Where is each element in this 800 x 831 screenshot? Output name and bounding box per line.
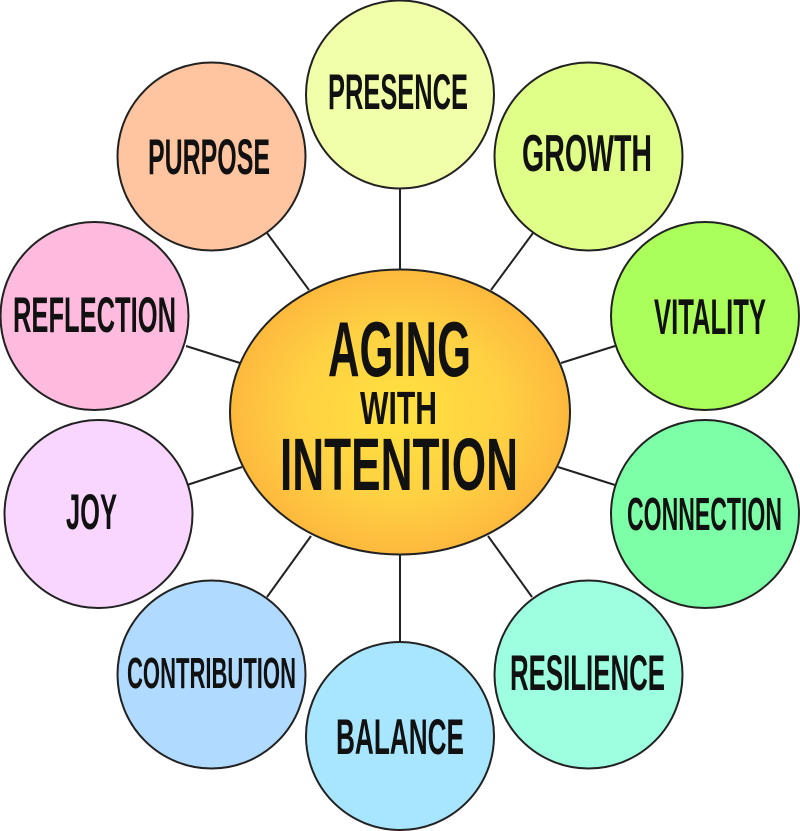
circle: presence: PRESENCE xyxy=(328,64,468,120)
circle: reflection xyxy=(0,222,188,410)
circle: connection xyxy=(611,420,799,608)
circle: presence xyxy=(306,0,494,188)
hub title line: aging: AGING xyxy=(328,305,471,393)
circle: purpose xyxy=(118,62,306,250)
circle: contribution xyxy=(118,580,306,768)
circle: balance xyxy=(306,642,494,830)
connector lines xyxy=(186,188,615,642)
circle: vitality xyxy=(611,222,799,410)
hub title line: intention: INTENTION xyxy=(280,423,518,506)
circle: joy: JOY xyxy=(66,484,117,540)
circle: resilience xyxy=(494,580,682,768)
circle: contribution: CONTRIBUTION xyxy=(127,649,296,698)
central hub: aging with intention xyxy=(230,270,570,554)
circle: reflection: REFLECTION xyxy=(13,287,176,343)
circle: growth xyxy=(494,62,682,250)
circle: purpose: PURPOSE xyxy=(148,129,270,185)
circle: growth: GROWTH xyxy=(522,125,652,183)
hub title line: with: WITH xyxy=(360,382,437,434)
circle: balance: BALANCE xyxy=(336,709,464,765)
circle: joy xyxy=(4,420,192,608)
